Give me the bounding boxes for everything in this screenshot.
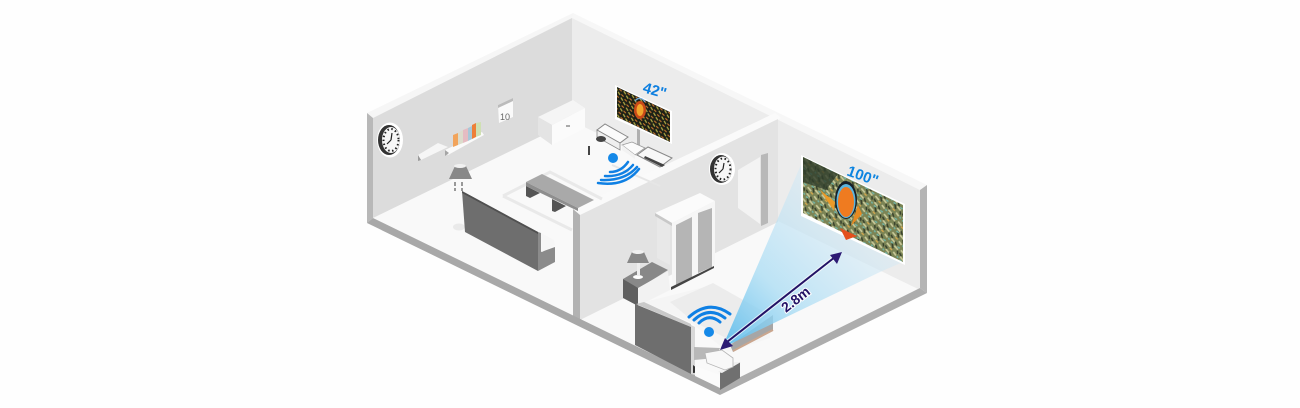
panel: 100 inch projected image: [801, 155, 905, 265]
baseboard strip: [367, 218, 927, 395]
icon: wifi signal bedroom: [689, 307, 730, 337]
icon: wall shelves with books: [418, 122, 484, 161]
icon: wall calendar: 10: [500, 112, 510, 122]
bed: [635, 283, 770, 388]
living room floor lamp: [449, 164, 472, 230]
sofa in living room: [462, 191, 555, 271]
media console with devices: [588, 124, 672, 186]
label: 100 inch: 100": [845, 163, 881, 190]
floor plate: [373, 120, 920, 387]
panel: bedroom floor area: [580, 222, 920, 387]
cabinet: [538, 100, 585, 145]
label: 42 inch: 42": [641, 80, 668, 102]
projection beam: [722, 160, 903, 348]
panel: dividing wall between rooms: [573, 113, 781, 320]
rug and coffee table: [503, 172, 602, 230]
projector on side table: [705, 350, 741, 390]
arrow: throw distance: [720, 252, 842, 350]
icon: bedroom wall clock: [709, 153, 735, 185]
wardrobe: [655, 193, 715, 290]
panel: living room left wall: [367, 13, 580, 223]
panel: 42 inch TV: [615, 85, 672, 145]
icon: living room wall clock: [377, 122, 403, 158]
label: 2.8m: 2.8m: [778, 283, 813, 315]
bedroom nightstand with lamp: [623, 250, 670, 306]
panel: rear wall across both rooms: [572, 13, 927, 293]
bench at foot of bed: [730, 315, 773, 352]
icon: wifi signal living room: [598, 153, 639, 184]
icon: wall calendar: [498, 98, 513, 123]
bedroom door recess: [738, 153, 768, 226]
